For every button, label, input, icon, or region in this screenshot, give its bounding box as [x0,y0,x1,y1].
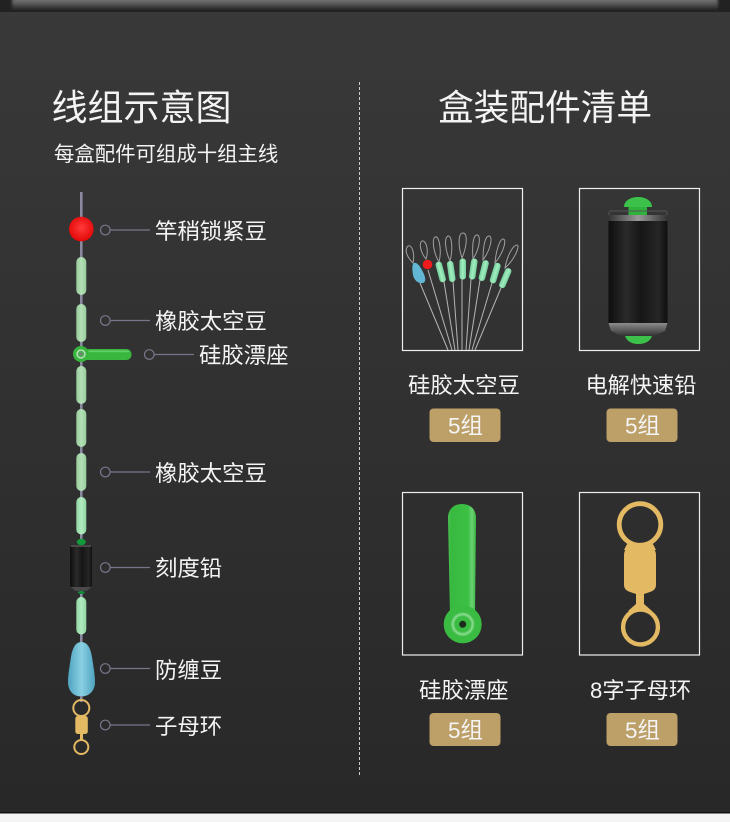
label: rubber bean lower [100,461,267,486]
quantity badge [606,713,678,746]
fishing line [80,192,83,702]
dashed centre divider [358,82,360,777]
product frame [402,492,522,655]
label: float seat: 硅胶漂座 [199,343,289,368]
label: rod tip bead: 竿稍锁紧豆 [155,219,267,244]
label: rubber bean upper [100,309,267,334]
quantity badge: 5组 [448,718,483,743]
quantity badge: 5组 [625,718,660,743]
label: sinker [100,556,222,581]
rubber bean capsules [76,257,86,491]
label: rubber bean lower: 橡胶太空豆 [155,461,267,486]
bottom white strip [0,812,730,822]
quantity badge: 5组 [448,414,483,438]
product frame [580,188,700,350]
label: rubber bean upper: 橡胶太空豆 [155,309,267,334]
label: swivel [100,714,222,739]
product frame [580,492,700,655]
quantity badge [606,408,678,442]
icon: gold swivel [619,504,661,644]
caption: 硅胶太空豆 [408,373,520,398]
quantity badge: 5组 [625,414,660,438]
icon: scale sinker [70,539,92,594]
quantity badge [430,713,500,746]
caption: 硅胶漂座 [419,678,509,703]
icon: green float seat [444,504,482,643]
heading: box contents: 盒装配件清单 [438,88,652,128]
caption: 8字子母环 [590,678,691,703]
label: swivel: 子母环 [155,714,222,739]
icon: anti-tangle bean [68,642,95,696]
icon: red bead [69,217,94,241]
label: anti-tangle bean [100,658,222,683]
subheading: 每盒配件可组成十组主线 [54,143,278,166]
label: sinker: 刻度铅 [155,556,222,581]
caption: 电解快速铅 [586,373,696,398]
icon: fan of leaders [406,233,518,350]
icon: swivel [73,696,89,754]
lower capsules [76,497,86,634]
icon: black sinker [608,197,668,344]
top edge band [0,0,730,12]
product frame [402,188,522,350]
quantity badge [430,408,500,442]
label: rod tip bead [100,219,267,244]
label: float seat [144,343,289,368]
icon: beads on leaders [412,258,512,289]
panel: electrolytic quick sinker [580,188,700,442]
heading: line set diagram: 线组示意图 [52,87,232,128]
panel: silicone space beans [402,188,522,442]
panel: 8-shaped swivel [580,492,700,746]
rig diagram [68,192,132,754]
label: anti-tangle bean: 防缠豆 [155,658,222,683]
icon: float seat [73,346,132,362]
panel: silicone float seat [402,492,522,746]
